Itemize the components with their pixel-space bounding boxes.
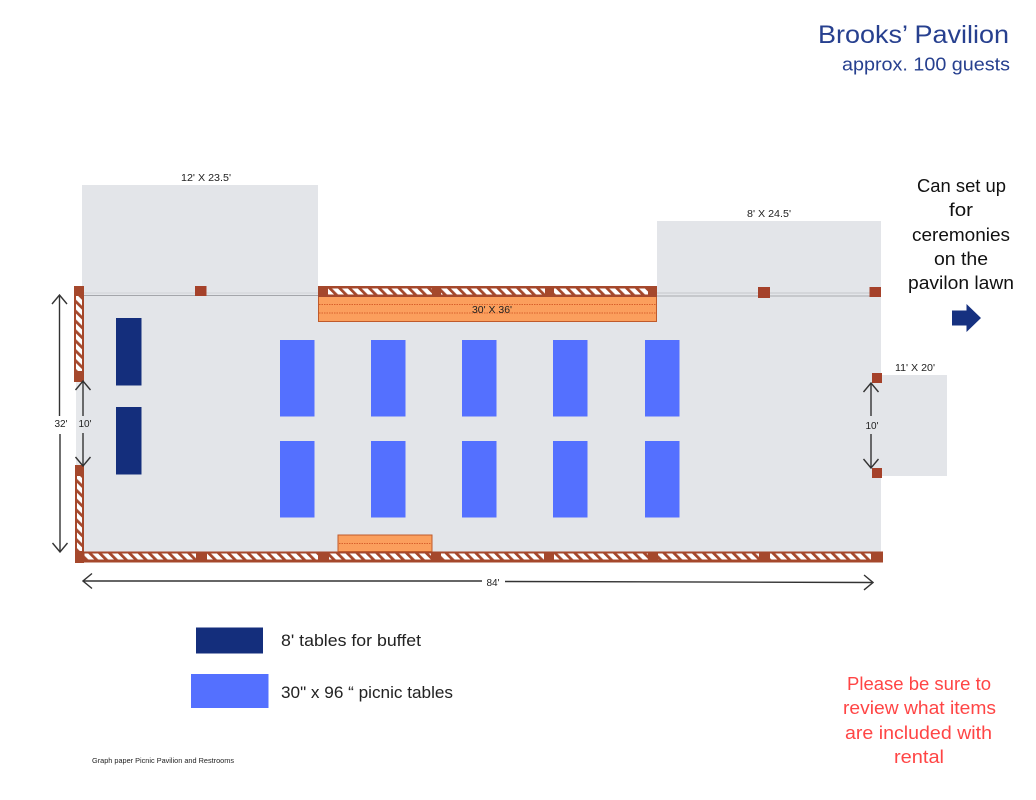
legend: picnic tables	[191, 674, 453, 708]
dimension labels: 84'	[486, 578, 500, 589]
dimension labels	[54, 173, 935, 589]
dimension labels: 10'	[78, 419, 92, 430]
dimension arrows	[60, 295, 873, 582]
top serving counter: 30' X 36'	[472, 305, 512, 316]
ceremonies note: Can set up	[917, 175, 1006, 196]
title: Brooks’ Pavilion	[818, 21, 1009, 49]
ceremonies note: on the	[934, 248, 988, 269]
rental reminder	[843, 673, 996, 767]
rental reminder: rental	[894, 746, 944, 767]
dimension labels: 8' X 24.5'	[747, 209, 791, 220]
ceremonies note: ceremonies	[912, 224, 1010, 245]
dimension labels: 11' X 20'	[895, 363, 935, 374]
roof line	[82, 293, 881, 296]
icon: right arrow	[952, 304, 981, 332]
dimension labels: 32'	[54, 419, 68, 430]
gap strip in left wall	[76, 380, 83, 466]
bottom wall	[75, 552, 883, 562]
dimension labels: 10'	[865, 421, 879, 432]
posts	[195, 286, 882, 478]
buffet tables	[116, 318, 142, 474]
pavilion floor and annex areas	[82, 185, 947, 553]
top serving counter	[318, 296, 656, 322]
ceremonies note	[908, 175, 1014, 293]
floor plan	[74, 185, 947, 563]
title	[818, 21, 1010, 74]
legend: picnic tables: 30" x 96 “ picnic tables	[281, 684, 453, 702]
picnic tables	[280, 340, 680, 518]
legend: buffet tables	[196, 628, 421, 654]
rental reminder: Please be sure to	[847, 673, 991, 694]
legend: buffet tables: 8' tables for buffet	[281, 632, 421, 650]
ceremonies note: pavilon lawn	[908, 272, 1014, 293]
left wall	[74, 286, 84, 563]
dimension labels: 12' X 23.5'	[181, 173, 231, 184]
top wall	[318, 286, 657, 297]
title: approx. 100 guests	[842, 54, 1010, 74]
ceremonies note: for	[949, 199, 973, 220]
rental reminder: review what items	[843, 697, 996, 718]
footer caption: Graph paper Picnic Pavilion and Restrooms	[92, 756, 234, 765]
bottom serving counter	[338, 535, 432, 552]
rental reminder: are included with	[845, 722, 992, 743]
